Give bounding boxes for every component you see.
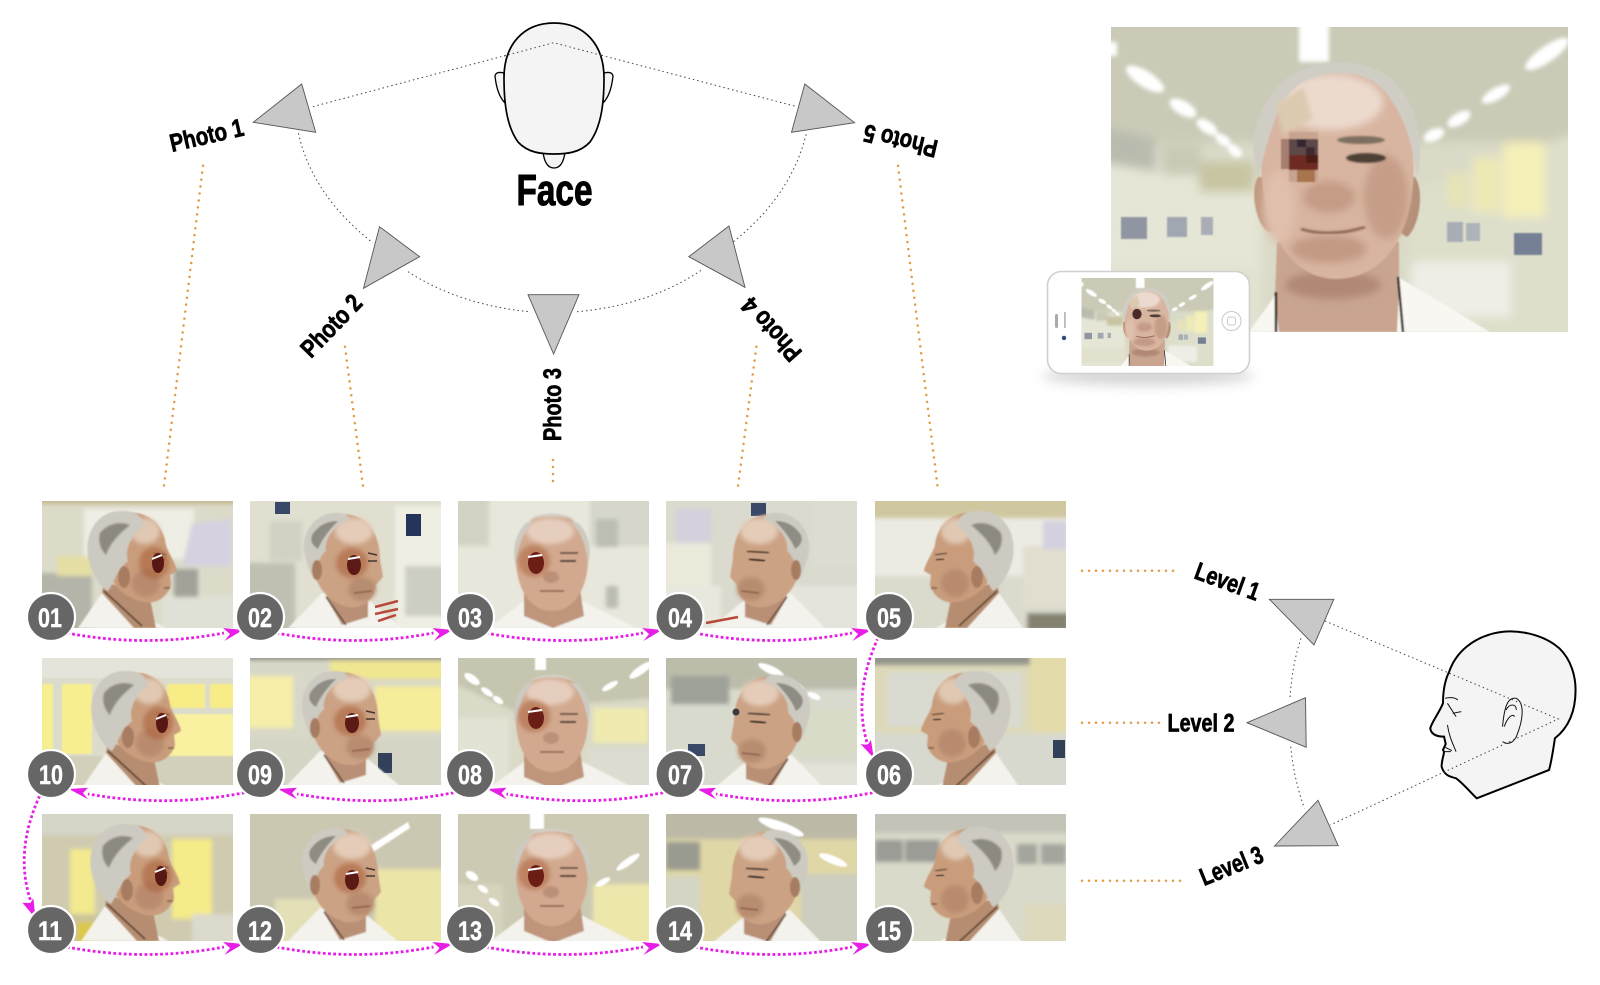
arrow 02 to 03 (276, 628, 452, 641)
badge 10: 10 (39, 760, 63, 790)
mosaic censor block (1281, 132, 1318, 182)
badge 10 (27, 750, 75, 798)
badge 08 (446, 750, 494, 798)
heading: Face: Face (516, 166, 592, 215)
photo 06 (875, 658, 1066, 785)
arrow 05 to 06 (861, 638, 878, 758)
camera: Level 3 (1274, 800, 1338, 846)
arrow 07 to 08 (488, 788, 663, 801)
label: Level 3: Level 3 (1196, 841, 1267, 892)
badge 03 (446, 593, 494, 641)
label: Photo 2: Photo 2 (295, 289, 368, 363)
arrow 09 to 10 (69, 788, 245, 801)
arrow 11 to 12 (67, 942, 243, 955)
badge 04: 04 (668, 603, 692, 633)
phone showing the portrait (1042, 272, 1254, 385)
diagram: face seen from above with five camera positions (164, 23, 940, 486)
badge 13 (446, 906, 494, 954)
badge 02 (236, 593, 284, 641)
camera: Photo 5 (792, 84, 855, 132)
photo: portrait with censored wound (1101, 17, 1578, 347)
icon: head from above (495, 23, 613, 168)
badge 06 (865, 750, 913, 798)
camera: Photo 4 (689, 226, 745, 287)
badge 11: 11 (38, 916, 62, 946)
photo 15 (875, 814, 1066, 941)
photo 02 (250, 501, 441, 628)
badge 04 (656, 593, 704, 641)
badge 08: 08 (458, 760, 482, 790)
badge 07: 07 (668, 760, 692, 790)
badge 01: 01 (38, 603, 62, 633)
label: Level 2: Level 2 (1168, 710, 1234, 738)
badge 06: 06 (877, 760, 901, 790)
photo 04 (666, 501, 857, 628)
connector lines from cameras to photo columns (164, 166, 938, 486)
arrow 06 to 07 (697, 788, 873, 801)
label: Photo 4: Photo 4 (736, 291, 807, 367)
badge 02: 02 (248, 603, 272, 633)
arrow 13 to 14 (486, 942, 662, 955)
photo 11 (42, 814, 233, 941)
label: Photo 5: Photo 5 (861, 118, 940, 162)
camera path lines (298, 43, 807, 312)
camera: Photo 3 (528, 295, 579, 354)
badge 01 (27, 593, 75, 641)
arrow 08 to 09 (278, 788, 454, 801)
badge 14 (656, 906, 704, 954)
camera: Level 2 (1247, 698, 1306, 747)
arrow 04 to 05 (695, 628, 871, 641)
photo 07 (666, 658, 857, 785)
photo grid: 15 sequential head shots (37, 496, 1073, 949)
photo 10 (42, 658, 233, 785)
badge 05 (865, 593, 913, 641)
diagram: head in profile with three camera levels (1082, 557, 1576, 892)
sight lines (1290, 621, 1558, 825)
label: Photo 3: Photo 3 (539, 368, 567, 441)
badge 11 (27, 906, 75, 954)
photo 03 (458, 501, 649, 628)
icon: head profile (1430, 631, 1576, 798)
badge 15: 15 (877, 916, 901, 946)
photo 14 (666, 814, 857, 941)
photo 05 (875, 501, 1066, 628)
label: Level 1: Level 1 (1191, 557, 1264, 607)
badge 15 (865, 906, 913, 954)
badge 13: 13 (458, 916, 482, 946)
camera: Photo 1 (253, 84, 316, 132)
connector lines from rows to levels (1082, 571, 1187, 881)
badge 12 (236, 906, 284, 954)
badge 03: 03 (458, 603, 482, 633)
camera: Photo 2 (364, 227, 420, 288)
arrow 03 to 04 (486, 628, 662, 641)
badge 05: 05 (877, 603, 901, 633)
photo 12 (250, 814, 441, 941)
photo 13 (458, 814, 649, 941)
badge 09: 09 (248, 760, 272, 790)
badge 14: 14 (668, 916, 692, 946)
label: Photo 1: Photo 1 (167, 114, 246, 158)
photo 01 (42, 501, 233, 628)
badge 12: 12 (248, 916, 272, 946)
arrow 12 to 13 (276, 942, 452, 955)
badge 09 (236, 750, 284, 798)
photo 08 (458, 658, 649, 785)
sequence arrows between photos (22, 628, 878, 955)
camera: Level 1 (1269, 599, 1334, 645)
arrow 10 to 11 (22, 796, 40, 918)
number badges (27, 593, 913, 954)
photo 09 (250, 658, 441, 785)
arrow 01 to 02 (67, 628, 243, 641)
arrow 14 to 15 (695, 942, 871, 955)
badge 07 (656, 750, 704, 798)
